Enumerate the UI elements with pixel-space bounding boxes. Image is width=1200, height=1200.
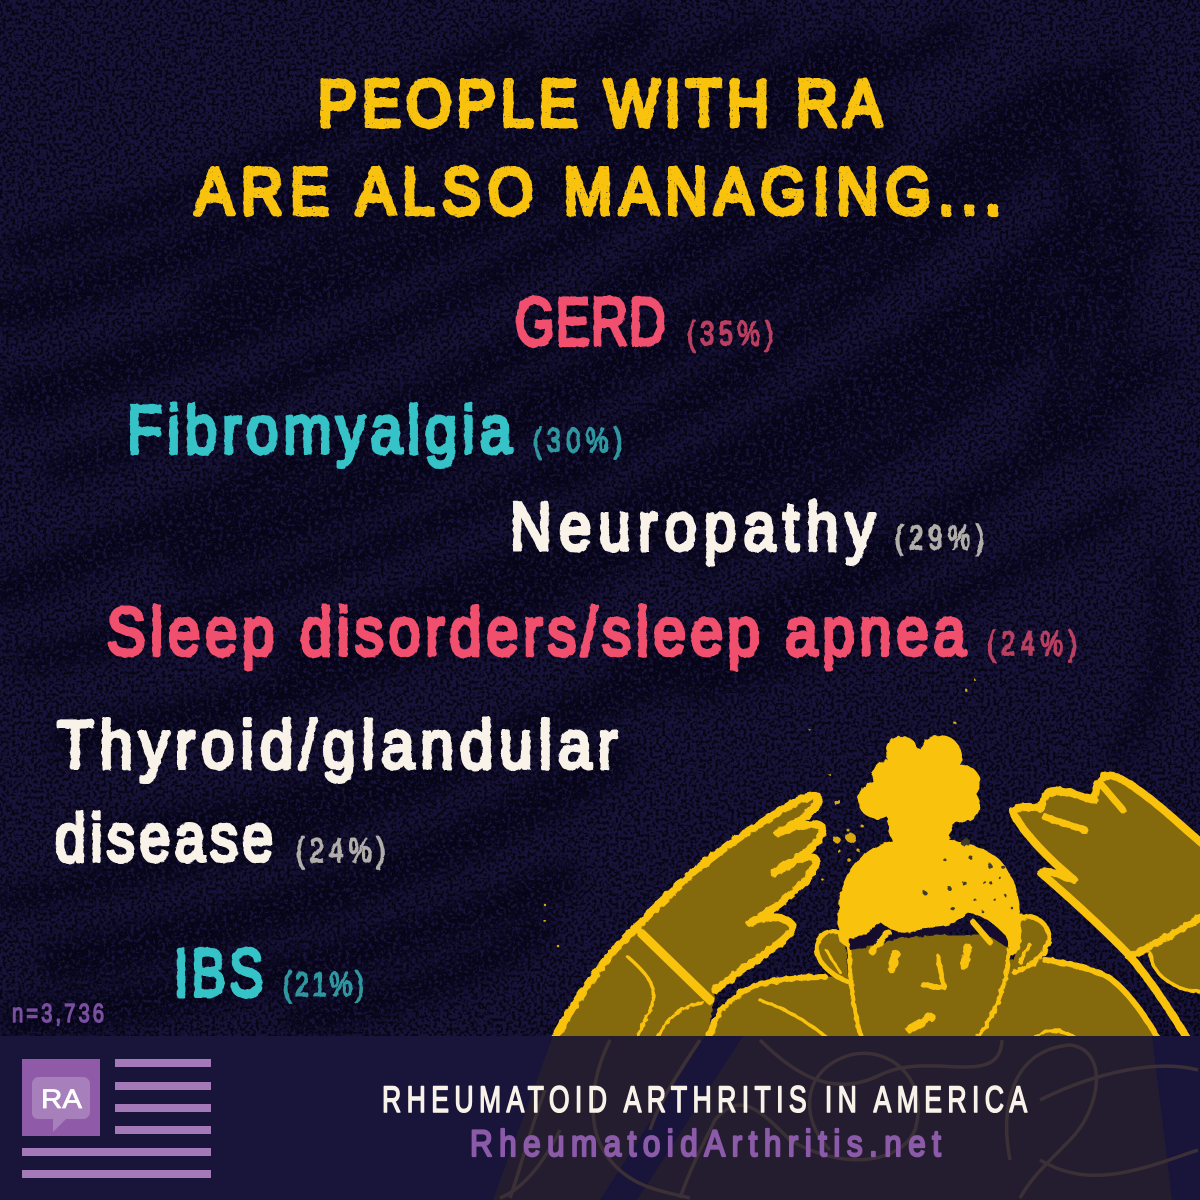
hair speckle <box>923 838 1013 913</box>
item: IBS 21% <box>174 935 364 1011</box>
torso and shoulders <box>708 958 1159 1040</box>
item: Sleep disorders/sleep apnea 24%: (24%) <box>987 626 1077 663</box>
figure showing through the band <box>493 1036 1172 1200</box>
item: Thyroid/glandular disease 24% <box>55 706 618 876</box>
right arm and hand <box>1013 775 1200 1040</box>
hair: fringe and head <box>838 837 1021 956</box>
title: ARE ALSO MANAGING... <box>195 156 1001 229</box>
hair: top bun <box>857 735 980 842</box>
item: Thyroid/glandular disease 24%: Thyroid/glandular <box>57 706 618 783</box>
item: GERD 35% <box>515 284 773 360</box>
footer title: RHEUMATOID ARTHRITIS IN AMERICA <box>382 1079 1028 1120</box>
ears <box>817 917 1049 982</box>
yellow dust specks <box>544 679 976 947</box>
item: IBS 21%: (21%) <box>283 967 364 1004</box>
item: Fibromyalgia 30%: (30%) <box>533 423 622 460</box>
logo RA text: RA <box>41 1084 82 1114</box>
logo stripes <box>22 1059 211 1178</box>
item: Thyroid/glandular disease 24%: disease <box>55 801 273 876</box>
item: IBS 21%: IBS <box>174 935 263 1011</box>
item: GERD 35%: (35%) <box>687 316 773 353</box>
logo square <box>22 1059 100 1136</box>
footer url: RheumatoidArthritis.net <box>470 1124 941 1165</box>
illustration: stressed woman with raised hands <box>544 679 1200 1040</box>
sample size note: n=3,736 <box>12 999 104 1028</box>
title <box>195 68 1001 229</box>
left arm and hand <box>553 796 822 1040</box>
footer band <box>0 1036 1200 1200</box>
item: GERD 35%: GERD <box>515 284 666 360</box>
face <box>848 925 1012 1040</box>
logo: RA flag <box>22 1059 211 1178</box>
item: Thyroid/glandular disease 24%: (24%) <box>296 833 385 870</box>
item: Sleep disorders/sleep apnea 24%: Sleep disorders/sleep apnea <box>107 595 966 670</box>
logo speech bubble <box>32 1077 90 1132</box>
item: Neuropathy 29%: Neuropathy <box>510 490 875 565</box>
title: PEOPLE WITH RA <box>318 68 883 141</box>
item: Fibromyalgia 30%: Fibromyalgia <box>127 393 513 468</box>
item: Neuropathy 29%: (29%) <box>895 520 984 557</box>
scribbled lines in the band <box>500 1040 1198 1198</box>
